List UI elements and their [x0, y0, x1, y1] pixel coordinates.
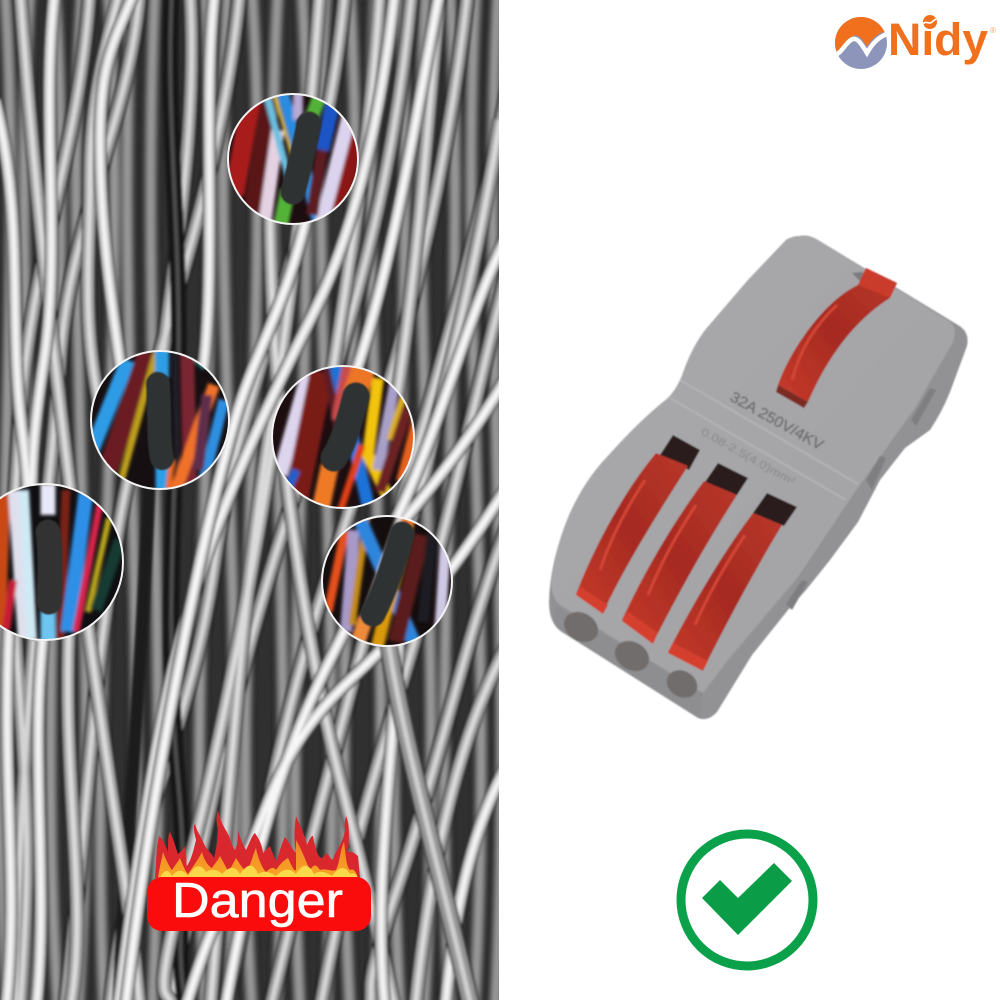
black wire lower left: [118, 470, 150, 1000]
danger badge with flames: [147, 810, 371, 931]
logo: Nidy: [833, 14, 996, 69]
large grey wire lower right: [385, 620, 472, 1000]
icon: green check mark: [681, 834, 813, 966]
wire gauge text: 0.08-2.5(4.0)mm²: [699, 426, 797, 488]
crease band: [670, 380, 858, 500]
front face with wire entries: [554, 606, 703, 718]
rating text: 32A 250V/4KV: [727, 389, 826, 454]
lever 1: [576, 435, 700, 614]
danger label: Danger: [172, 874, 343, 928]
electrical tape: [48, 532, 50, 602]
lever 3: [668, 493, 797, 671]
logo wordmark: Nıdy: [888, 14, 988, 65]
magnifier: middle-left junction: [90, 345, 229, 495]
connector: lever wire connector: [549, 236, 968, 719]
connector body: [549, 236, 968, 719]
electrical tape: [334, 396, 356, 458]
magnifier: far-left junction: [0, 484, 125, 642]
logo i-dot swirl: [923, 15, 938, 29]
side notches: [786, 388, 936, 610]
logo mark: [833, 17, 889, 69]
connector top face: [551, 236, 955, 693]
electrical tape: [158, 384, 162, 458]
magnifier: lower-right junction: [321, 508, 453, 652]
lever 2: [622, 463, 748, 644]
magnifier: top junction with green wire: [228, 90, 360, 228]
flames: [155, 810, 360, 878]
registered mark: ®: [990, 26, 996, 35]
top lever: [776, 268, 897, 408]
electrical tape: [293, 124, 309, 192]
electrical tape: [373, 534, 402, 614]
panel: tangled grey wires photo: [0, 0, 510, 1000]
magnifier: middle-right junction: [271, 360, 418, 512]
black wire centre: [170, 0, 186, 1000]
danger banner: [147, 877, 371, 931]
